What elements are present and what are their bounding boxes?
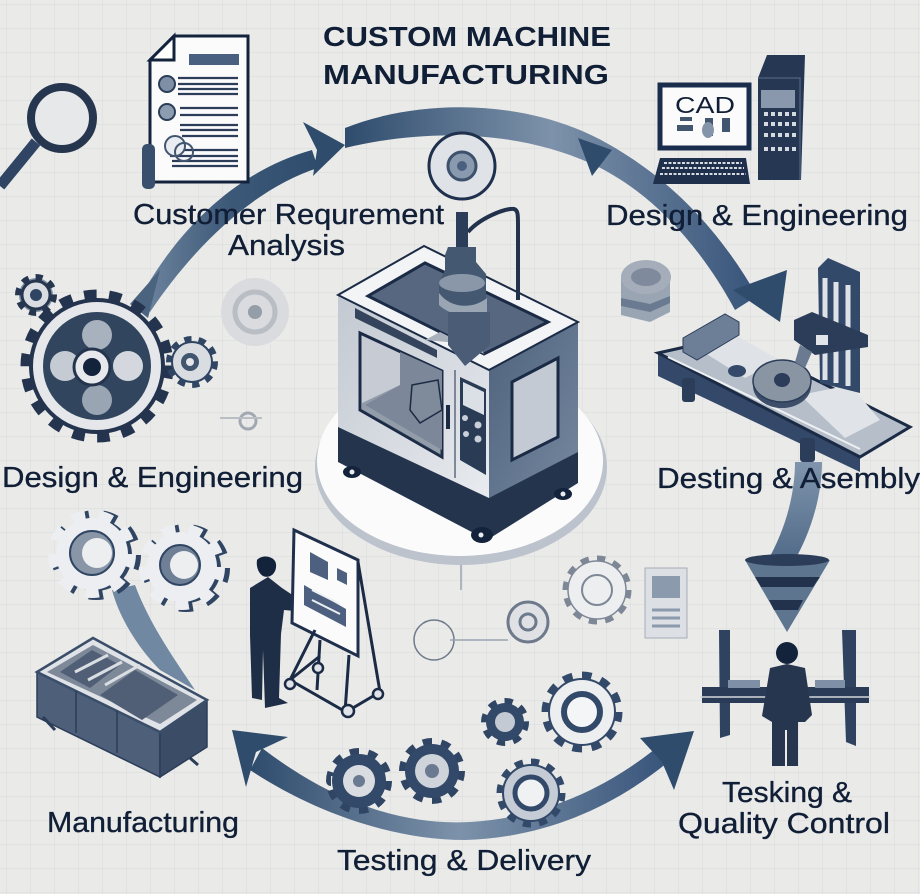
icon: faded disc xyxy=(221,278,289,346)
icon: bottom gear row xyxy=(331,676,618,823)
title xyxy=(323,21,611,90)
spindle and cable xyxy=(439,209,518,366)
arrow: right downward band xyxy=(768,462,822,568)
icon: metal cylinder part xyxy=(621,260,671,322)
icon: drawing board on easel xyxy=(285,530,383,717)
label: testing and assembly: Desting & Asembly xyxy=(657,463,920,495)
cnc machine body xyxy=(338,246,578,543)
label: customer requirement analysis xyxy=(133,199,444,262)
icon: small faded part xyxy=(220,413,262,429)
icon: manufacturing cabinet xyxy=(37,638,207,777)
arrow: top arc to testing and assembly xyxy=(345,107,787,322)
icon: large gear cluster xyxy=(19,278,214,436)
label: testing and quality control xyxy=(678,777,890,840)
arrow: left arc to customer analysis xyxy=(130,122,345,318)
arrow: bottom arc xyxy=(232,730,694,840)
icon: gears lower left xyxy=(54,516,223,605)
label: testing and quality control: Tesking & xyxy=(722,777,852,809)
icon: CAD workstation xyxy=(653,55,805,184)
label: design and engineering left: Design & Engineering xyxy=(2,462,303,494)
icon: requirements document xyxy=(142,36,248,189)
icon: inspector figure xyxy=(762,642,812,766)
label: design and engineering right: Design & Engineering xyxy=(606,200,908,232)
icon: vertical column and clamp xyxy=(794,258,868,393)
label: customer requirement analysis: Analysis xyxy=(228,230,345,262)
icon: funnel xyxy=(745,554,830,632)
icon: quality control station xyxy=(700,630,870,746)
label: manufacturing: Manufacturing xyxy=(47,807,239,839)
label: testing and delivery: Testing & Delivery xyxy=(337,845,592,877)
arrow: gears to cabinet xyxy=(112,585,195,690)
title: MANUFACTURING xyxy=(323,59,609,90)
label: customer requirement analysis: Customer Requrement xyxy=(133,199,444,231)
title: CUSTOM MACHINE xyxy=(323,21,611,52)
icon: outlined gears and faded parts xyxy=(414,559,687,660)
panel: central machine on platform xyxy=(315,209,607,565)
platform xyxy=(315,366,607,565)
icon: conveyor assembly line xyxy=(658,314,910,472)
icon: magnifying glass xyxy=(0,87,93,186)
icon: CAD workstation: CAD xyxy=(675,92,735,118)
icon: engineer figure xyxy=(250,557,306,708)
label: testing and quality control: Quality Control xyxy=(678,808,890,840)
icon: lens circle xyxy=(429,133,495,199)
